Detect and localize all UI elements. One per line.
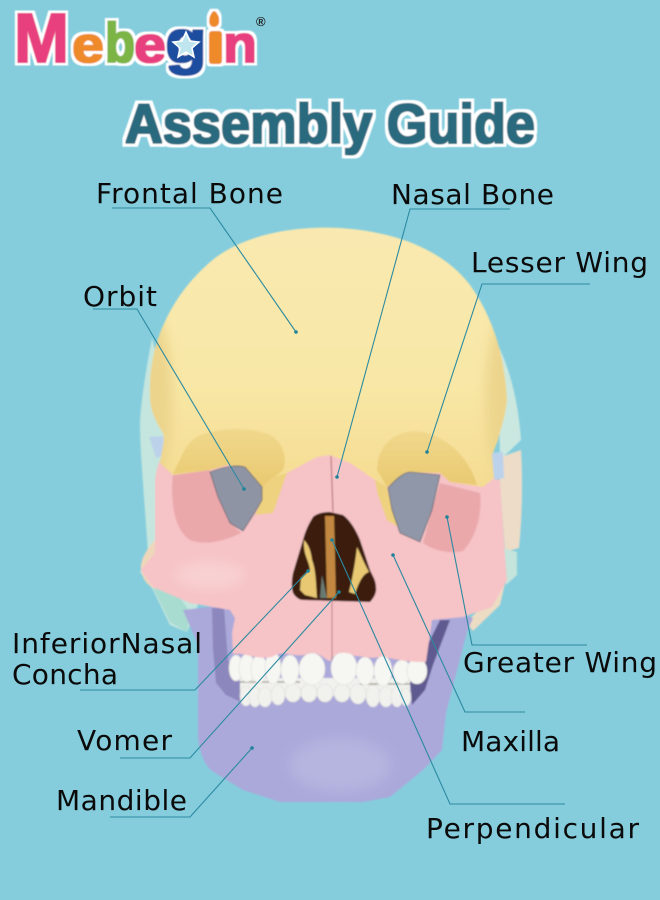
left orbit roof [173, 429, 285, 487]
label: Lesser Wing [425, 246, 648, 454]
right orbit floor [423, 483, 480, 552]
teeth gap shadow [240, 682, 410, 684]
lower tooth band [240, 678, 410, 696]
logo: Mebegin [14, 0, 257, 77]
label: Vomer [77, 590, 341, 758]
frontal bone [150, 228, 507, 487]
right orbit interior [388, 472, 440, 542]
logo letter g: g [165, 8, 207, 75]
lower teeth [240, 678, 411, 707]
label: Orbit: Orbit [83, 280, 157, 313]
right lower beige fragment [466, 575, 507, 631]
maxilla [141, 450, 507, 662]
logo letter b: b [105, 11, 135, 74]
nasal cavity [292, 512, 376, 602]
label: Lesser Wing: Lesser Wing [471, 246, 648, 279]
maxilla seam [331, 600, 333, 660]
nasal seam [331, 456, 333, 512]
perpendicular plate [325, 516, 336, 598]
logo star [173, 32, 199, 57]
logo flame [210, 12, 218, 26]
title: Assembly Guide: Assembly Guide [125, 92, 535, 155]
right temporal bone [498, 345, 521, 460]
mandible right shadow [410, 620, 450, 705]
skull illustration [128, 228, 530, 802]
right frontal process [375, 480, 398, 527]
label: Mandible: Mandible [56, 784, 187, 817]
left frontal process [255, 473, 287, 515]
label: Frontal Bone [96, 177, 298, 334]
right orbit roof [377, 431, 477, 487]
label: Maxilla [391, 553, 560, 758]
left tan zygomatic tip [141, 540, 160, 590]
label: Orbit [83, 280, 246, 491]
lower tooth row [240, 684, 411, 707]
left orbit interior [210, 466, 262, 531]
vomer [320, 575, 327, 598]
cheek highlight [175, 561, 245, 589]
label: Maxilla: Maxilla [461, 725, 560, 758]
logo letter e: e [134, 17, 166, 73]
left temporal bone [140, 338, 198, 632]
mandible left shadow [212, 608, 243, 703]
label: Nasal Bone [335, 178, 554, 479]
logo letter M: M [14, 0, 69, 77]
logo letter n: n [223, 16, 257, 74]
label: Greater Wing [445, 515, 657, 679]
left orbit floor [172, 470, 241, 543]
left teal bone fragment [153, 588, 190, 632]
label: Frontal Bone: Frontal Bone [96, 177, 283, 210]
label: Greater Wing: Greater Wing [463, 646, 657, 679]
shade left [150, 324, 174, 462]
chin highlight [290, 739, 390, 791]
label: Perpendicular: Perpendicular [426, 812, 639, 845]
right sphenoid patch [490, 452, 504, 480]
upper teeth [229, 651, 427, 686]
right nasal concha [349, 547, 369, 594]
shade right [484, 328, 507, 452]
label: Perpendicular [330, 538, 639, 845]
right teal fragment [502, 548, 517, 585]
mandible [183, 605, 473, 802]
label: Mandible [56, 746, 254, 817]
label: InferiorNasal Concha [12, 569, 310, 691]
upper tooth row [229, 651, 427, 686]
logo letter i [210, 32, 221, 63]
frontal edge shading [128, 310, 530, 490]
right beige bone [498, 450, 522, 552]
left sphenoid patch [149, 436, 165, 458]
label: Vomer: Vomer [77, 724, 172, 757]
left nasal concha [300, 540, 317, 598]
label: InferiorNasal Concha: InferiorNasal [12, 627, 202, 660]
logo letter e: e [72, 17, 104, 73]
label: Nasal Bone: Nasal Bone [391, 178, 554, 211]
registered mark: ® [256, 14, 266, 29]
label: InferiorNasal Concha: Concha [12, 658, 118, 691]
